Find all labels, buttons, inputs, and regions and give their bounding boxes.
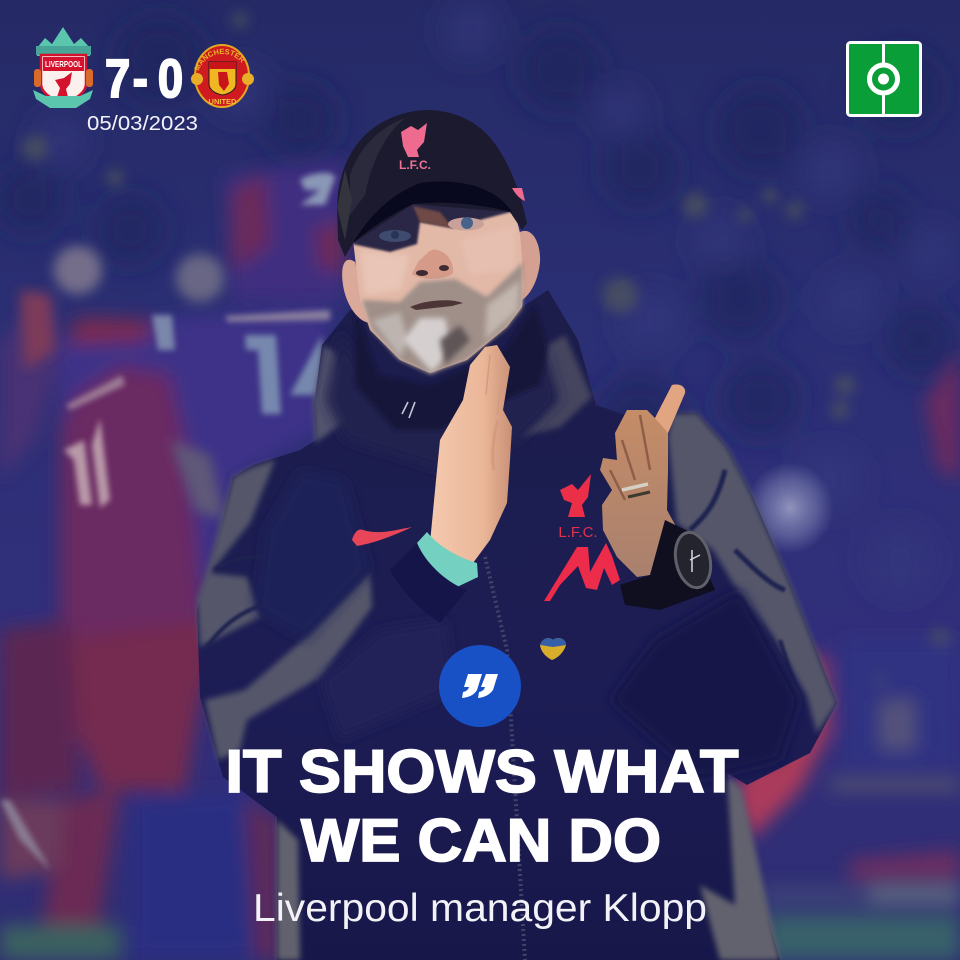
head xyxy=(337,110,540,374)
ears xyxy=(342,260,370,323)
grey beard xyxy=(362,262,523,374)
Ukraine heart pin xyxy=(540,638,566,660)
nike swoosh xyxy=(352,527,412,546)
face xyxy=(353,205,524,373)
player heads xyxy=(20,246,225,520)
jacket navy folds xyxy=(255,330,800,780)
forehead shadow and eyes xyxy=(352,200,514,252)
cap: L.F.C. xyxy=(399,158,431,172)
right hand xyxy=(600,384,685,577)
LFC crest xyxy=(560,474,591,517)
bokeh light xyxy=(746,462,834,554)
AXA sponsor xyxy=(544,543,620,601)
Manchester United crest: UNITED xyxy=(209,97,237,106)
match date: 05/03/2023 xyxy=(87,113,198,135)
quote icon xyxy=(439,645,521,727)
left hand xyxy=(430,345,512,563)
jacket body xyxy=(197,290,837,960)
jacket logos xyxy=(352,474,620,660)
cap crest xyxy=(401,123,427,157)
jacket dark creases xyxy=(205,470,800,700)
player shirt numbers and names xyxy=(0,173,335,870)
mouth xyxy=(410,300,463,310)
crowd mottling xyxy=(0,4,954,592)
club badges and score xyxy=(33,27,254,109)
Manchester United crest xyxy=(191,44,254,108)
watch xyxy=(620,520,715,610)
Liverpool crest xyxy=(33,27,93,108)
inner zip pulls xyxy=(402,402,415,418)
BeSoccer logo xyxy=(848,42,920,116)
attribution: Liverpool manager Klopp xyxy=(253,887,707,930)
teal wristband xyxy=(417,532,478,587)
jacket grey highlights xyxy=(197,335,837,960)
clapping hands xyxy=(390,345,715,623)
manager figure: Klopp xyxy=(197,290,837,960)
score: 7-0 xyxy=(105,48,183,109)
cheek tone xyxy=(360,250,410,295)
headline: WE CAN DO xyxy=(301,807,661,874)
jacket logos: L.F.C. xyxy=(558,524,598,541)
headline xyxy=(226,738,738,874)
Manchester United crest: MANCHESTER xyxy=(194,48,244,71)
Liverpool crest: LIVERPOOL xyxy=(45,59,82,69)
jacket zip xyxy=(485,557,525,960)
cap xyxy=(337,110,527,257)
collar xyxy=(355,305,548,430)
headline: IT SHOWS WHAT xyxy=(226,738,738,805)
left cuff xyxy=(390,543,467,623)
nose xyxy=(412,250,453,279)
